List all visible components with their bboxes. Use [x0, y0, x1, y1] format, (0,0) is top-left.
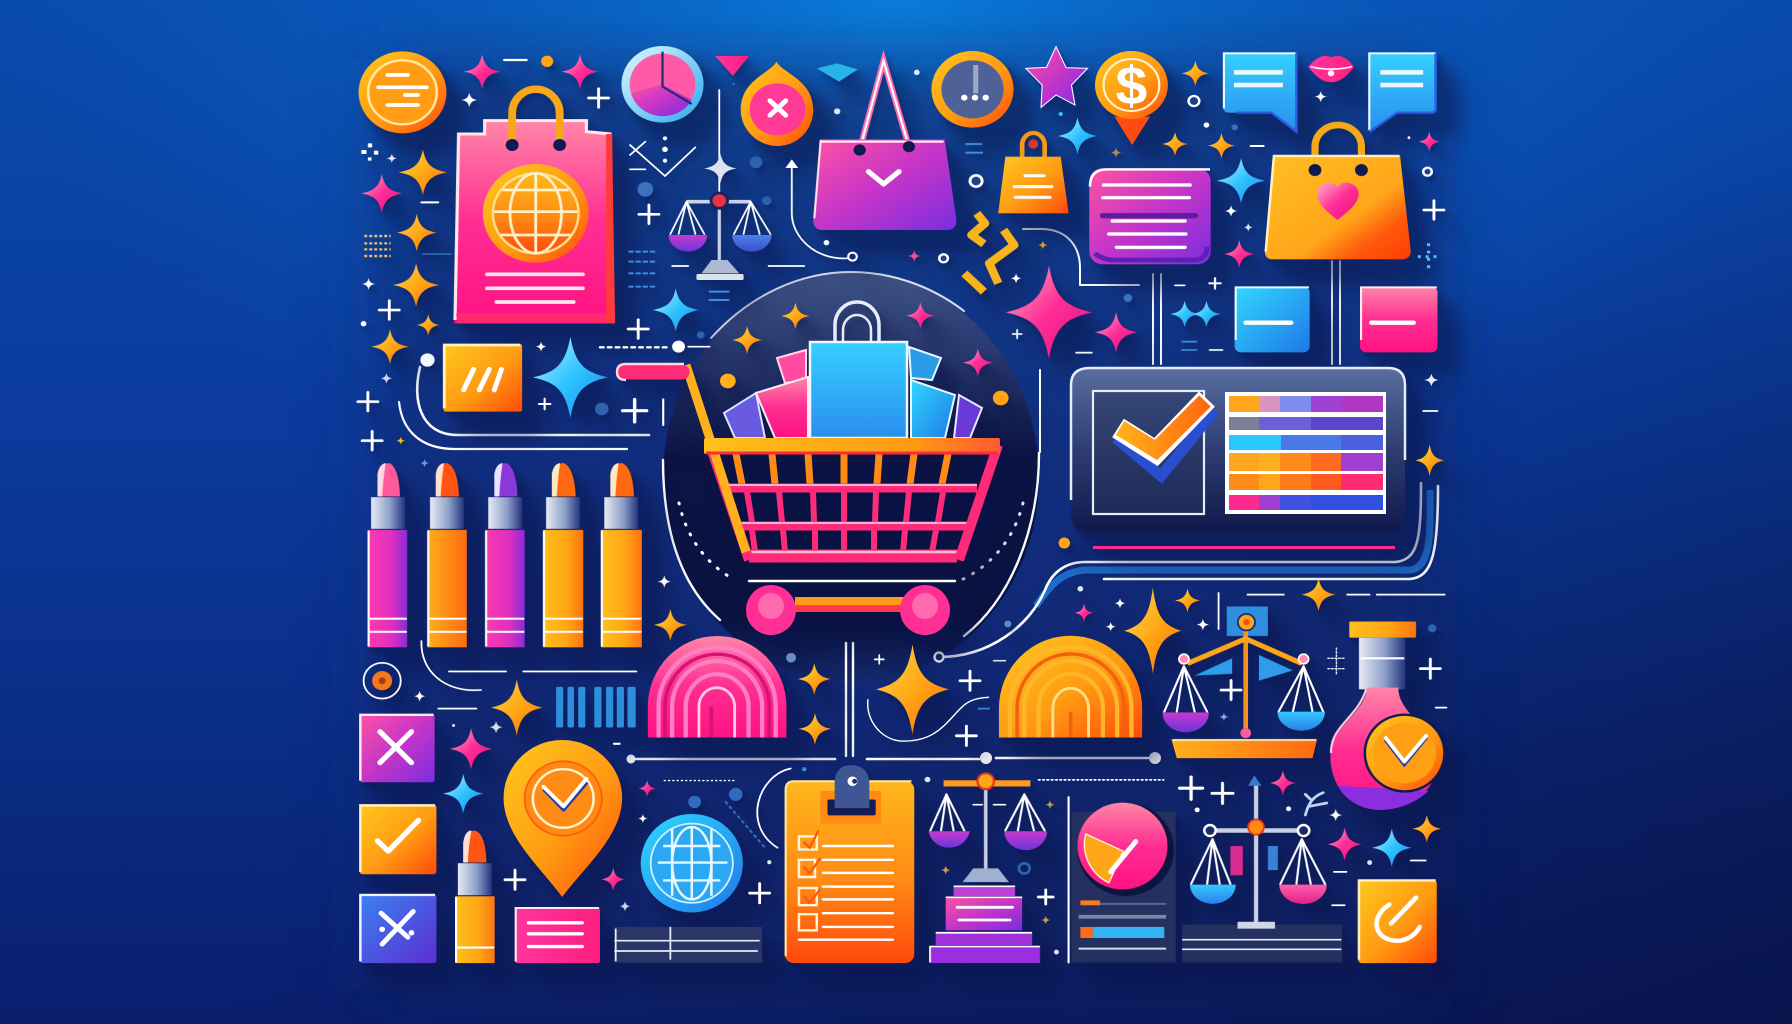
icon: dollar pin	[1095, 51, 1168, 145]
top-left quadrant icons	[358, 46, 956, 450]
sparkles: lower right	[1327, 815, 1441, 905]
icon: balance scale top	[669, 153, 771, 280]
icon: dark text bars	[614, 927, 762, 963]
icon: cross pin	[741, 62, 813, 146]
icon: orange heart bag	[1265, 125, 1411, 259]
icon: cyan minus tile	[1235, 287, 1310, 352]
icon: pie chart report panel	[1069, 797, 1176, 962]
thin lines and marks	[364, 459, 884, 744]
top-right quadrant icons	[906, 47, 1444, 411]
decorative arc and dots near globe	[664, 767, 806, 864]
icon: orange fingerprint arch	[999, 636, 1142, 738]
icon: orange list coin	[359, 51, 446, 133]
icon: orange clipboard checklist	[785, 765, 914, 963]
colour table	[1225, 392, 1386, 514]
lipstick 2	[427, 463, 467, 647]
cart axle line	[749, 581, 955, 612]
icon: orange ring dial	[931, 51, 1014, 128]
icon: blue barcode bars	[556, 687, 636, 728]
icon: cyan globe badge	[641, 814, 743, 912]
lipstick 5	[601, 463, 642, 647]
sparkles: around big pink sparkle	[906, 241, 1439, 411]
central dark circle behind cart	[663, 272, 1039, 682]
icon: check tile	[360, 805, 436, 874]
icon: cyan bird mark	[817, 63, 858, 114]
icon: pink minus tile	[1360, 287, 1437, 352]
icon layer with long shadows	[358, 46, 1446, 963]
icon: orange partial ring tile	[1358, 880, 1437, 963]
icon: pink document bag with globe	[454, 89, 615, 323]
icon: small orange tag bag	[998, 133, 1069, 213]
icon: orange location pin	[504, 740, 622, 897]
icon: balance scale with grey beam	[1182, 775, 1342, 962]
icon: balance scale with purple step base	[925, 773, 1164, 963]
icon: pink list tile	[515, 907, 600, 963]
icon: right speech bubble	[1369, 53, 1436, 132]
icon: cross tile	[360, 714, 435, 782]
globe emblem	[483, 164, 589, 263]
icon: lips	[1308, 56, 1354, 82]
icon: large cyan sparkle and dotted line	[420, 337, 710, 425]
icon: left speech bubble	[1223, 53, 1296, 132]
sparkles: center-left	[628, 288, 810, 388]
lipstick 3	[485, 463, 525, 647]
icon: pie chart dial	[621, 46, 704, 123]
icon: arrow curve	[785, 159, 857, 261]
sparkles and curves center bottom	[868, 444, 1445, 745]
icon: small pink marker	[715, 56, 749, 85]
icon: dollar pin: $	[1116, 56, 1147, 116]
icon: orange balance scale	[1162, 607, 1346, 758]
icon: blue cross tile	[360, 894, 436, 963]
check box outline	[1093, 391, 1215, 514]
icon: small lipstick	[455, 831, 495, 963]
sparkles: right of panel	[1217, 158, 1265, 268]
lipstick 4	[543, 463, 583, 647]
icon: row of lipsticks	[368, 463, 642, 647]
sparkles: left column	[358, 143, 451, 450]
icon: orange slash tile	[444, 344, 522, 412]
sparkles: center lower left	[443, 609, 831, 911]
icon: shopping cart with goods	[617, 302, 1000, 635]
icon: purple star	[1026, 47, 1087, 107]
lipstick 1	[368, 463, 407, 647]
icon: gold zigzag	[964, 213, 1014, 292]
small marks around lower scales	[1180, 771, 1342, 821]
cart wheels	[746, 585, 950, 635]
panel: checkmark and colour table	[1071, 367, 1405, 549]
icon: purple text panel	[1089, 168, 1211, 264]
cart contents	[724, 302, 982, 438]
lines and marks around scale	[629, 90, 804, 300]
cart frame and basket	[617, 364, 1000, 560]
sparkles: top row	[461, 54, 609, 107]
icon: pink flask with check badge	[1330, 621, 1446, 810]
sparkles: top right	[914, 61, 1444, 270]
connector lines	[399, 229, 1438, 764]
icon: pink fingerprint arch	[648, 636, 786, 738]
bottom-right quadrant icons	[868, 444, 1446, 963]
icon: pink shopping bag with chevron	[813, 61, 956, 230]
bottom-left quadrant icons	[360, 459, 914, 963]
